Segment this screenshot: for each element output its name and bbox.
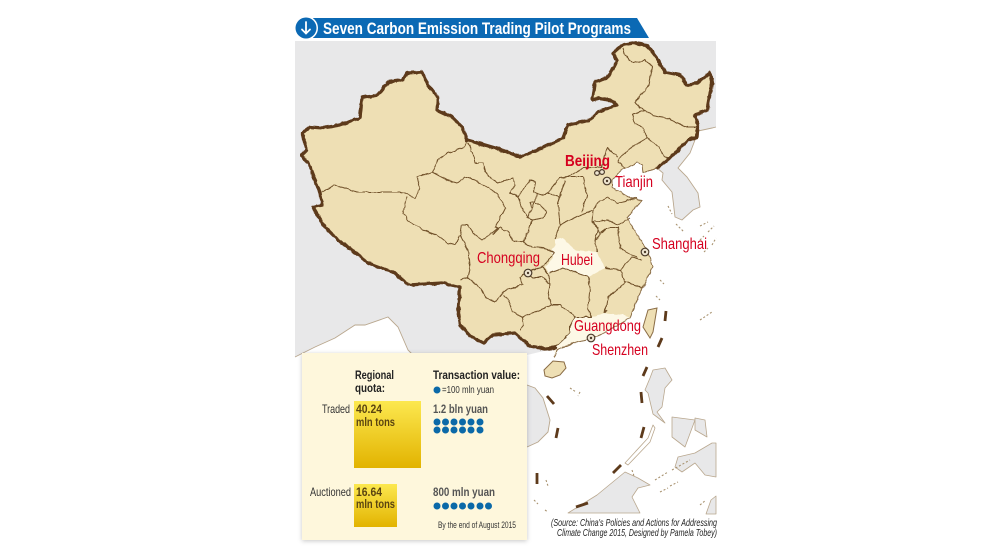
marker: Beijing [595, 170, 604, 175]
source credit: Climate Change 2015, Designed by Pamela Tobey) [557, 527, 717, 539]
province: Guangdong (pilot) [555, 313, 630, 357]
label: Tianjin: Tianjin [615, 174, 653, 191]
label: Beijing: Beijing [565, 153, 610, 170]
marker: Shenzhen [587, 334, 595, 342]
Mindanao [675, 443, 716, 477]
label: Shanghai: Shanghai [652, 236, 707, 253]
Borneo [568, 472, 650, 513]
row label: Auctioned: Auctioned [310, 485, 351, 499]
bar: traded quota: mln tons [356, 415, 395, 429]
bar: auctioned quota: 16.64 [356, 485, 382, 499]
map background: neighbouring land [295, 41, 716, 514]
city labels [477, 153, 707, 359]
Taiwan [643, 308, 657, 338]
heading: transaction value: Transaction value: [433, 368, 520, 382]
label: Hubei: Hubei [561, 252, 593, 269]
map: seas [295, 127, 716, 516]
legend key [434, 385, 494, 396]
date note: By the end of August 2015 [438, 520, 516, 530]
marker centres [527, 180, 646, 339]
auctioned transaction value [433, 485, 495, 510]
label: Shenzhen: Shenzhen [592, 342, 648, 359]
coastline [555, 162, 657, 357]
traded transaction value: 1.2 bln yuan [433, 402, 488, 416]
traded transaction value [433, 402, 488, 434]
label: Guangdong: Guangdong [574, 318, 641, 335]
Palawan [625, 425, 655, 465]
sea below map [295, 514, 720, 550]
neighbouring coastlines [295, 127, 716, 447]
bar: traded quota: 40.24 [356, 402, 382, 416]
panel: legend [302, 353, 527, 540]
heading: regional quota: quota: [355, 381, 385, 395]
icon: down arrow [296, 18, 316, 38]
land [302, 43, 712, 357]
legend key: =100 mln yuan [442, 385, 494, 396]
map: Taiwan and Hainan [544, 308, 657, 378]
bar: auctioned quota [354, 484, 397, 527]
Hainan [544, 361, 566, 378]
bar: traded quota [354, 401, 421, 468]
bar: auctioned quota: mln tons [356, 497, 395, 511]
province boundaries [322, 48, 698, 347]
map: Southeast Asian islands [568, 368, 716, 514]
marker: Chongqing [524, 269, 532, 277]
province: Hubei (pilot) [545, 238, 605, 277]
map: China [302, 43, 712, 357]
title: Seven Carbon Emission Trading Pilot Programs [323, 20, 631, 38]
title banner [294, 16, 649, 40]
map: nine-dash line [537, 311, 666, 507]
auctioned transaction value: 800 mln yuan [433, 485, 495, 499]
source credit: (Source: China's Policies and Actions for Addressing [551, 517, 717, 529]
row label: Traded: Traded [322, 402, 350, 416]
label: Chongqing: Chongqing [477, 250, 540, 267]
marker: Shanghai [641, 248, 649, 256]
marker: Tianjin [603, 177, 611, 185]
heading: regional quota: Regional [355, 368, 394, 382]
city markers [524, 170, 649, 342]
Indonesia fragments [706, 496, 716, 514]
scattered islets [534, 206, 716, 512]
land border [302, 43, 712, 349]
Visayas [672, 417, 695, 447]
Luzon [645, 368, 672, 423]
